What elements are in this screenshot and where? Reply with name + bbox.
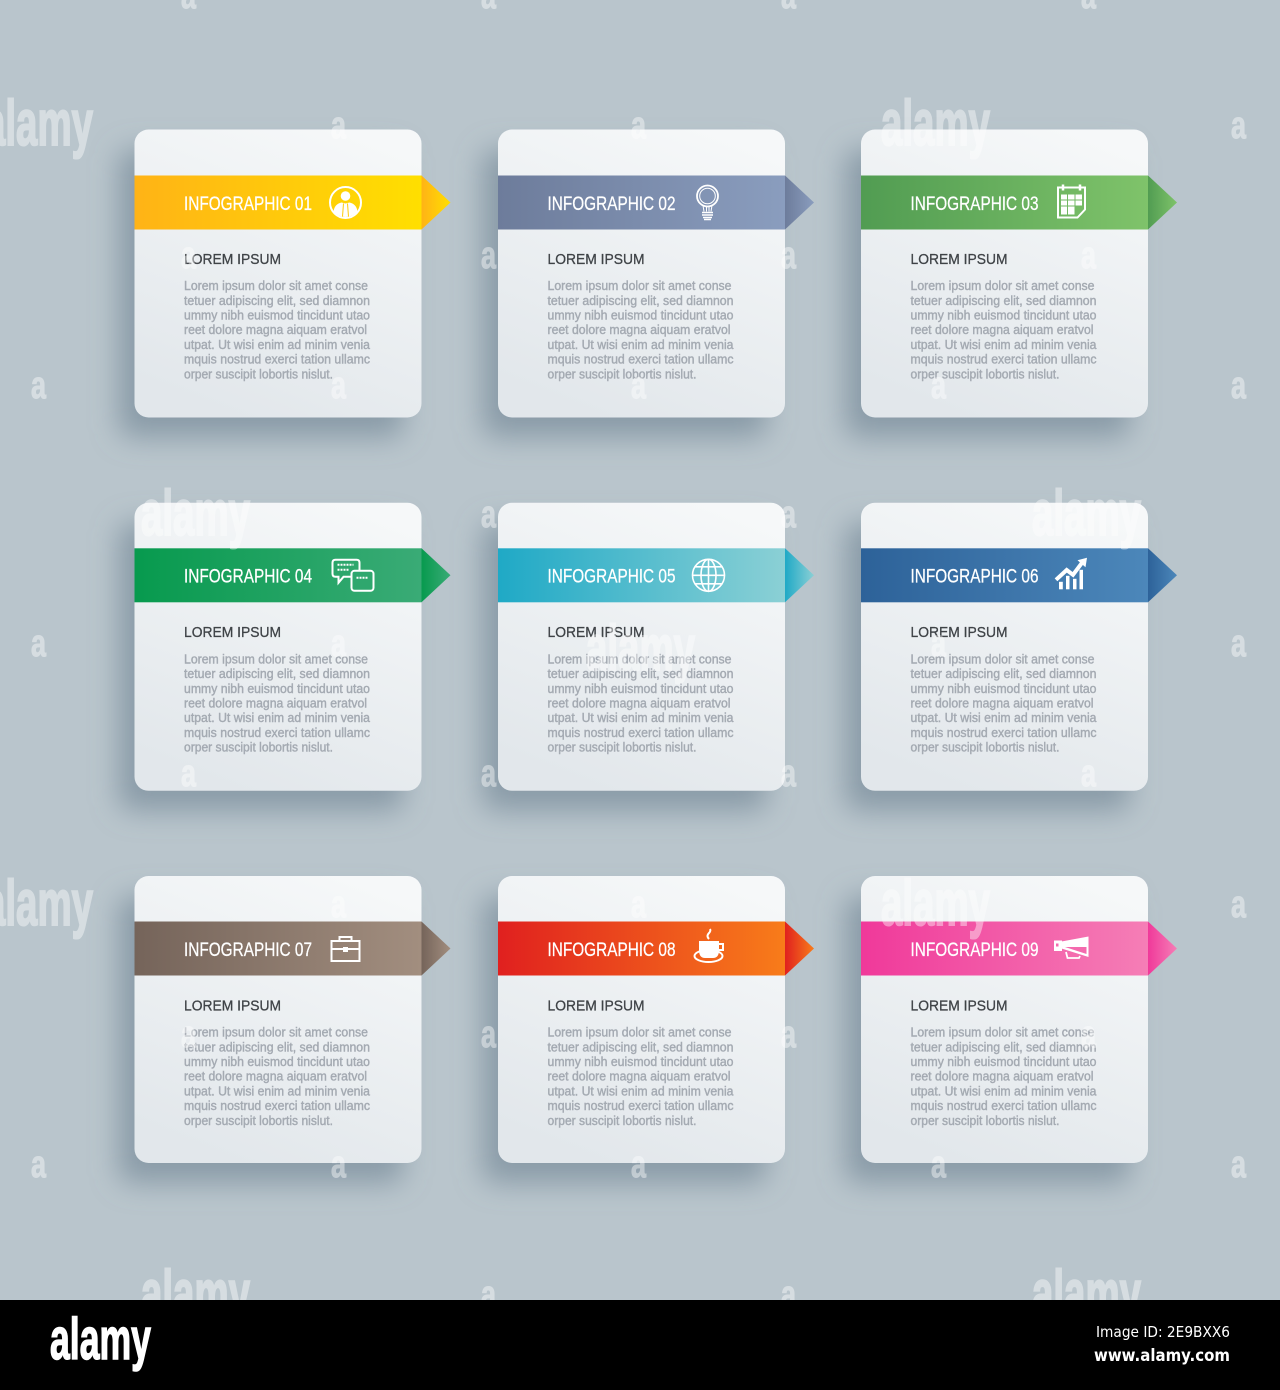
body text: reet dolore magna aiquam eratvol [184,1070,367,1084]
watermarks: a [1231,365,1247,407]
watermarks: a [931,365,947,407]
watermarks: a [631,365,647,407]
card panel [134,876,422,1163]
ribbon band [861,922,1148,976]
body text: tetuer adipiscing elit, sed diamnon [184,1040,370,1054]
body text: utpat. Ut wisi enim ad minim venia [184,338,370,352]
body text: reet dolore magna aiquam eratvol [910,696,1094,710]
body text: tetuer adipiscing elit, sed diamnon [548,1040,734,1054]
ribbon arrow [1148,176,1177,230]
ribbon band [498,176,785,230]
body text: mquis nostrud exerci tation ullamc [184,726,370,740]
watermarks: a [481,1014,497,1056]
card 03 [845,130,1177,438]
body text: Lorem ipsum dolor sit amet conse [184,652,368,666]
footer bar [0,1300,1280,1390]
body text: Lorem ipsum dolor sit amet conse [184,1026,368,1040]
body text [184,652,370,755]
body text: ummy nibh euismod tincidunt utao [548,1055,734,1069]
watermarks: alamy [881,87,990,159]
body text: utpat. Ut wisi enim ad minim venia [910,711,1097,725]
watermarks: a [481,1274,497,1316]
card 09 [845,876,1177,1183]
watermarks: a [631,1144,647,1186]
ribbon title: INFOGRAPHIC 08 [548,940,676,961]
body text: mquis nostrud exerci tation ullamc [548,353,734,367]
watermarks: a [331,623,347,665]
subheading: LOREM IPSUM [548,997,644,1014]
body text: orper suscipit lobortis nislut. [910,741,1060,755]
watermarks: alamy [881,867,990,939]
body text: reet dolore magna aiquam eratvol [548,323,730,337]
website: www.alamy.com [1094,1346,1230,1366]
body text: Lorem ipsum dolor sit amet conse [548,1026,732,1040]
icon: coffee cup [694,929,723,962]
card panel [861,503,1148,791]
ribbon title: INFOGRAPHIC 03 [910,194,1038,215]
card 08 [482,876,814,1183]
watermarks: a [781,1014,797,1056]
body text: tetuer adipiscing elit, sed diamnon [910,667,1097,681]
card panel [498,876,785,1163]
watermarks: a [931,623,947,665]
icon: speech bubbles [332,560,374,591]
body text: ummy nibh euismod tincidunt utao [184,682,370,696]
watermarks: a [1231,623,1247,665]
watermarks: a [1231,1144,1247,1186]
image id: Image ID: 2E9BXX6 [1096,1323,1230,1341]
watermarks: alamy [141,477,250,549]
card panel [498,130,785,418]
body text: mquis nostrud exerci tation ullamc [910,353,1096,367]
body text: utpat. Ut wisi enim ad minim venia [910,338,1097,352]
watermarks: a [781,753,797,795]
body text: tetuer adipiscing elit, sed diamnon [548,667,734,681]
subheading: LOREM IPSUM [548,624,644,641]
body text: ummy nibh euismod tincidunt utao [548,308,734,322]
watermarks: a [781,1274,797,1316]
ribbon title: INFOGRAPHIC 01 [184,194,312,215]
card panel [861,876,1148,1163]
ribbon arrow [1148,548,1177,602]
body text: ummy nibh euismod tincidunt utao [910,682,1097,696]
body text [184,279,370,381]
ribbon band [498,922,785,976]
watermarks: a [931,1144,947,1186]
watermarks: a [31,1144,47,1186]
ribbon band [134,922,422,976]
body text: reet dolore magna aiquam eratvol [548,696,730,710]
body text: ummy nibh euismod tincidunt utao [910,1055,1097,1069]
ribbon title: INFOGRAPHIC 09 [910,940,1038,961]
body text: orper suscipit lobortis nislut. [184,1114,333,1128]
icon: briefcase [332,937,360,961]
watermarks: a [781,494,797,536]
icon: megaphone [1054,936,1088,958]
card 06 [845,503,1177,811]
subheading: LOREM IPSUM [910,997,1008,1014]
body text: orper suscipit lobortis nislut. [184,741,333,755]
body text: Lorem ipsum dolor sit amet conse [548,652,732,666]
body text: ummy nibh euismod tincidunt utao [184,1055,370,1069]
watermarks: a [181,1014,197,1056]
card 01 [118,130,450,438]
body text [910,279,1097,381]
body text: ummy nibh euismod tincidunt utao [184,308,370,322]
body text: utpat. Ut wisi enim ad minim venia [548,1084,734,1098]
watermarks: a [1231,105,1247,147]
card 02 [482,130,814,438]
body text: reet dolore magna aiquam eratvol [910,1070,1094,1084]
ribbon title: INFOGRAPHIC 05 [548,567,676,588]
body text: Lorem ipsum dolor sit amet conse [184,279,368,293]
body text: orper suscipit lobortis nislut. [184,367,333,381]
ribbon band [134,548,422,602]
ribbon arrow [422,176,450,230]
card 07 [118,876,450,1183]
body text: mquis nostrud exerci tation ullamc [548,726,734,740]
body text: utpat. Ut wisi enim ad minim venia [184,711,370,725]
subheading: LOREM IPSUM [548,251,644,268]
body text: Lorem ipsum dolor sit amet conse [548,279,732,293]
ribbon band [498,548,785,602]
watermarks: a [781,235,797,277]
body text: ummy nibh euismod tincidunt utao [548,682,734,696]
footer logo: alamy [50,1307,151,1372]
body text: orper suscipit lobortis nislut. [910,1114,1060,1128]
watermarks: a [631,105,647,147]
body text: mquis nostrud exerci tation ullamc [184,1099,370,1113]
watermarks: a [331,1144,347,1186]
icon: globe [692,559,724,591]
body text: orper suscipit lobortis nislut. [548,367,696,381]
watermarks: a [331,884,347,926]
watermarks: a [1081,1014,1097,1056]
watermarks: alamy [586,612,695,684]
body text: Lorem ipsum dolor sit amet conse [910,1026,1095,1040]
card panel [861,130,1148,418]
watermarks: a [631,884,647,926]
body text: tetuer adipiscing elit, sed diamnon [910,1040,1097,1054]
subheading: LOREM IPSUM [184,251,281,268]
body text: reet dolore magna aiquam eratvol [910,323,1094,337]
watermarks: a [31,365,47,407]
body text: mquis nostrud exerci tation ullamc [910,1099,1096,1113]
subheading: LOREM IPSUM [184,624,281,641]
ribbon arrow [785,176,814,230]
icon: person [330,187,361,218]
body text: mquis nostrud exerci tation ullamc [548,1099,734,1113]
body text: tetuer adipiscing elit, sed diamnon [184,667,370,681]
watermarks: a [481,753,497,795]
body text [548,652,734,755]
ribbon arrow [785,548,814,602]
body text: Lorem ipsum dolor sit amet conse [910,279,1095,293]
watermarks: alamy [1032,1257,1141,1329]
body text: utpat. Ut wisi enim ad minim venia [548,338,734,352]
watermarks: a [331,105,347,147]
card panel [134,503,422,791]
body text [910,1026,1097,1128]
body text: orper suscipit lobortis nislut. [548,1114,696,1128]
body text: tetuer adipiscing elit, sed diamnon [548,294,734,308]
body text [548,1026,734,1128]
body text: mquis nostrud exerci tation ullamc [184,353,370,367]
watermarks: a [1081,235,1097,277]
body text [184,1026,370,1128]
ribbon arrow [422,922,450,976]
watermarks: a [481,494,497,536]
ribbon title: INFOGRAPHIC 04 [184,567,312,588]
subheading: LOREM IPSUM [184,997,281,1014]
card 04 [118,503,450,811]
ribbon title: INFOGRAPHIC 02 [548,194,676,215]
watermarks: a [1081,753,1097,795]
ribbon title: INFOGRAPHIC 07 [184,940,312,961]
body text: tetuer adipiscing elit, sed diamnon [910,294,1097,308]
body text: orper suscipit lobortis nislut. [910,367,1060,381]
watermarks: a [481,235,497,277]
card panel [134,130,422,418]
body text: Lorem ipsum dolor sit amet conse [910,652,1095,666]
body text [548,279,734,381]
body text: reet dolore magna aiquam eratvol [184,323,367,337]
body text [910,652,1097,755]
watermarks: a [331,365,347,407]
body text: orper suscipit lobortis nislut. [548,741,696,755]
body text: mquis nostrud exerci tation ullamc [910,726,1096,740]
watermarks: alamy [141,1257,250,1329]
ribbon title: INFOGRAPHIC 06 [910,567,1038,588]
card panel [498,503,785,791]
ribbon arrow [422,548,450,602]
body text: reet dolore magna aiquam eratvol [184,696,367,710]
ribbon band [861,176,1148,230]
body text: reet dolore magna aiquam eratvol [548,1070,730,1084]
body text: utpat. Ut wisi enim ad minim venia [184,1084,370,1098]
body text: tetuer adipiscing elit, sed diamnon [184,294,370,308]
icon: light bulb [697,186,718,220]
subheading: LOREM IPSUM [910,251,1008,268]
ribbon arrow [785,922,814,976]
icon: rising chart [1056,558,1087,589]
watermarks: a [31,623,47,665]
watermarks: a [1231,884,1247,926]
watermarks: alamy [1032,477,1141,549]
body text: ummy nibh euismod tincidunt utao [910,308,1097,322]
card 05 [482,503,814,811]
ribbon band [134,176,422,230]
body text: utpat. Ut wisi enim ad minim venia [910,1084,1097,1098]
subheading: LOREM IPSUM [910,624,1008,641]
ribbon band [861,548,1148,602]
watermarks: a [181,753,197,795]
watermarks: a [181,235,197,277]
body text: utpat. Ut wisi enim ad minim venia [548,711,734,725]
icon: calendar [1058,184,1085,218]
ribbon arrow [1148,922,1177,976]
